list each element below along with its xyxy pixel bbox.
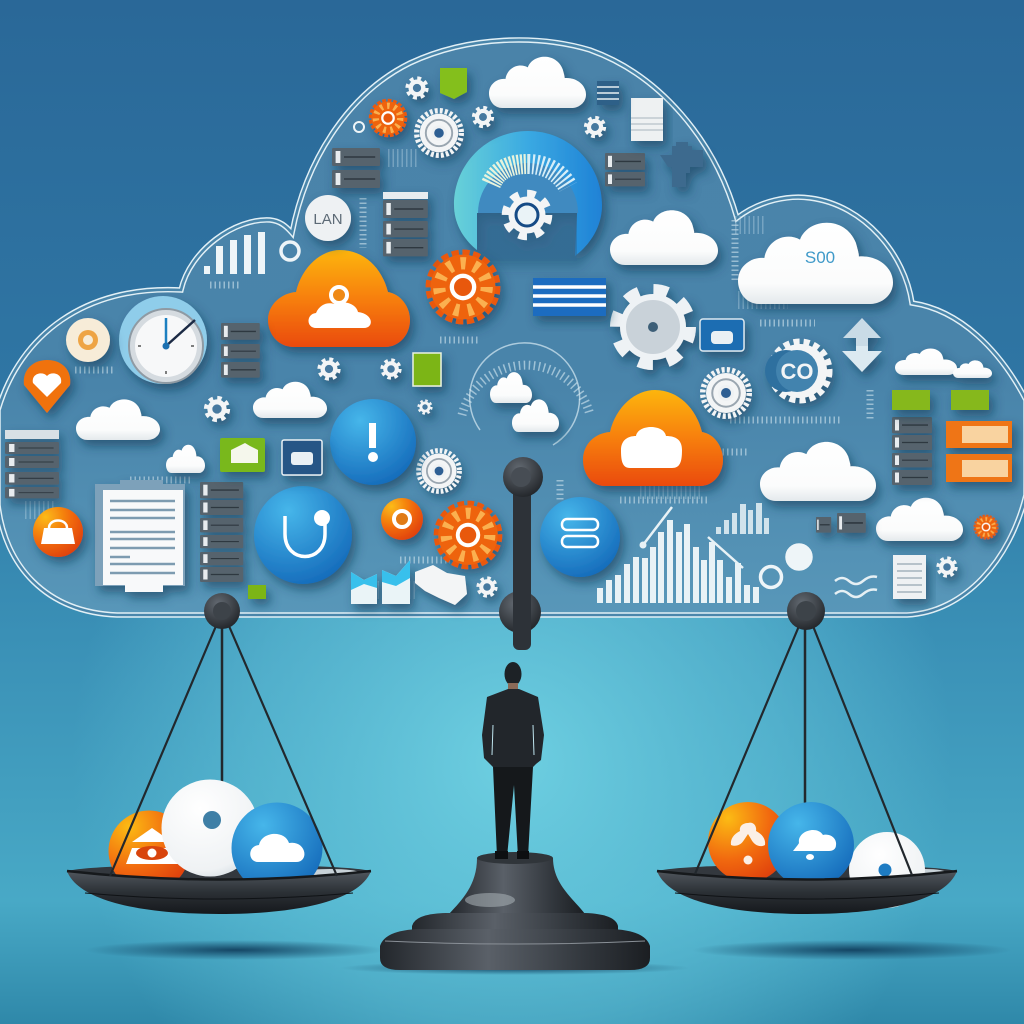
left scale pan front	[67, 871, 371, 914]
icon: orange badges	[24, 318, 423, 557]
icon: CO gear: CO	[780, 359, 814, 384]
stipple patches	[25, 158, 788, 590]
main cloud panel	[0, 40, 1024, 615]
cloud label: S00	[805, 248, 835, 267]
left scale side strings	[110, 626, 337, 876]
icon: white clouds	[76, 57, 992, 541]
icon: clock	[119, 296, 207, 384]
icon: server racks	[5, 148, 932, 582]
icon: green tiles	[220, 68, 989, 599]
icon: orange gears	[370, 100, 998, 567]
icon: LAN badge	[305, 195, 351, 241]
icon: navy tiles	[282, 81, 744, 475]
right scale pan front	[657, 871, 957, 914]
icon: LAN badge: LAN	[313, 211, 343, 228]
right scale center string	[804, 626, 806, 805]
icon: orange cloud right	[583, 390, 723, 486]
icon: document	[95, 480, 185, 592]
bar chart: main	[597, 503, 769, 603]
bar chart: top left	[204, 232, 265, 274]
icon: large cog	[617, 291, 689, 363]
icon: orange tiles	[946, 421, 1012, 482]
icon: blue circles	[254, 399, 620, 584]
icon: arrows	[842, 318, 882, 372]
icon: small document	[893, 555, 926, 599]
icon: gauge	[454, 131, 602, 261]
icon: fringed white gears	[417, 111, 749, 491]
scattered data hatching	[75, 198, 870, 560]
right scale spheres	[708, 802, 925, 908]
person	[482, 662, 544, 859]
left scale pan back	[67, 864, 371, 880]
central lever	[499, 457, 543, 650]
icon: small cog gears	[206, 78, 956, 596]
right scale pan back	[657, 864, 957, 880]
icon: white box	[631, 98, 663, 141]
map tiles	[351, 560, 467, 605]
icon: striped block	[533, 278, 606, 316]
pivot knobs	[204, 592, 825, 630]
icon: orange cloud left	[268, 250, 410, 347]
wave lines	[835, 576, 877, 597]
background glow	[0, 560, 1024, 1024]
left scale center string	[221, 626, 223, 785]
pedestal	[380, 852, 650, 970]
inner circle with hatch ring	[462, 343, 590, 445]
floor shadows	[85, 940, 1012, 975]
left scale spheres	[108, 780, 322, 894]
right scale side strings	[695, 626, 912, 875]
icon: CO gear	[765, 342, 829, 400]
circle outlines	[281, 122, 811, 588]
